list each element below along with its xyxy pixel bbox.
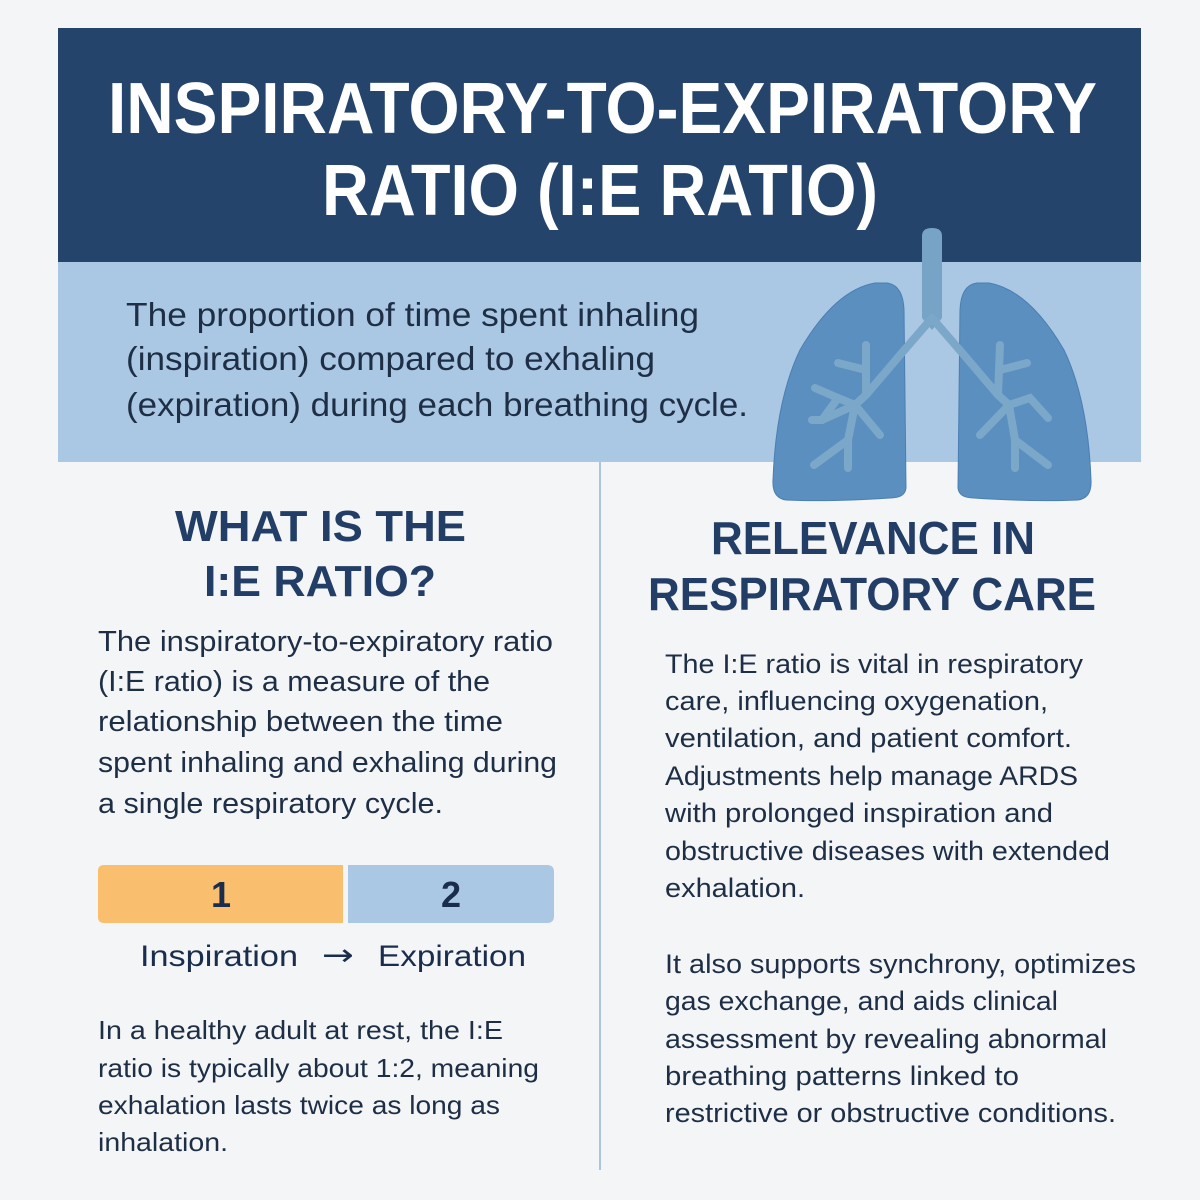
left paragraph: a single respiratory cycle. (98, 788, 443, 820)
left bottom paragraph: ratio is typically about 1:2, meaning (98, 1053, 539, 1083)
right paragraph 1: obstructive diseases with extended (665, 836, 1110, 866)
divider (599, 462, 601, 1170)
bar labels: Inspiration (140, 940, 298, 973)
ratio bar: 1 (211, 874, 231, 915)
left heading (175, 502, 466, 606)
right paragraph 1 (664, 649, 1110, 903)
right paragraph 2: assessment by revealing abnormal (665, 1024, 1107, 1054)
title (108, 69, 1097, 231)
right heading: RELEVANCE IN (711, 512, 1035, 564)
right paragraph 2: restrictive or obstructive conditions. (665, 1098, 1116, 1128)
right paragraph 2: breathing patterns linked to (665, 1061, 1019, 1091)
header band (58, 28, 1141, 262)
right paragraph 2: gas exchange, and aids clinical (665, 986, 1058, 1016)
right paragraph 1: ventilation, and patient comfort. (665, 723, 1072, 753)
ratio bar (98, 865, 554, 923)
right paragraph 1: exhalation. (665, 873, 805, 903)
title: INSPIRATORY-TO-EXPIRATORY (108, 69, 1097, 149)
left paragraph: (I:E ratio) is a measure of the (98, 666, 490, 698)
bar labels: → (322, 938, 354, 973)
right paragraph 2 (665, 949, 1136, 1128)
icon: lungs (773, 228, 1091, 501)
bar labels: Expiration (378, 940, 526, 973)
definition text: (inspiration) compared to exhaling (126, 340, 655, 377)
left bottom paragraph: exhalation lasts twice as long as (98, 1090, 500, 1120)
ratio bar: 2 (441, 874, 461, 915)
right paragraph 2: It also supports synchrony, optimizes (665, 949, 1136, 979)
definition text: The proportion of time spent inhaling (126, 296, 699, 333)
definition text (126, 296, 748, 423)
right paragraph 1: The I:E ratio is vital in respiratory (665, 649, 1084, 679)
left paragraph (98, 626, 557, 820)
definition band (58, 262, 1141, 462)
left bottom paragraph: inhalation. (98, 1127, 228, 1157)
left paragraph: spent inhaling and exhaling during (98, 747, 557, 779)
left heading: WHAT IS THE (175, 502, 466, 551)
left heading: I:E RATIO? (204, 557, 436, 606)
right paragraph 1: Adjustments help manage ARDS (665, 761, 1078, 791)
right heading (648, 512, 1096, 620)
bar labels (140, 938, 526, 973)
right heading: RESPIRATORY CARE (648, 568, 1096, 620)
right paragraph 1: with prolonged inspiration and (664, 798, 1053, 828)
left paragraph: The inspiratory-to-expiratory ratio (98, 626, 553, 658)
right paragraph 1: care, influencing oxygenation, (665, 686, 1048, 716)
title: RATIO (I:E RATIO) (322, 151, 878, 231)
left bottom paragraph (98, 1015, 539, 1157)
definition text: (expiration) during each breathing cycle. (126, 386, 748, 423)
left bottom paragraph: In a healthy adult at rest, the I:E (98, 1015, 503, 1045)
left paragraph: relationship between the time (98, 706, 503, 738)
